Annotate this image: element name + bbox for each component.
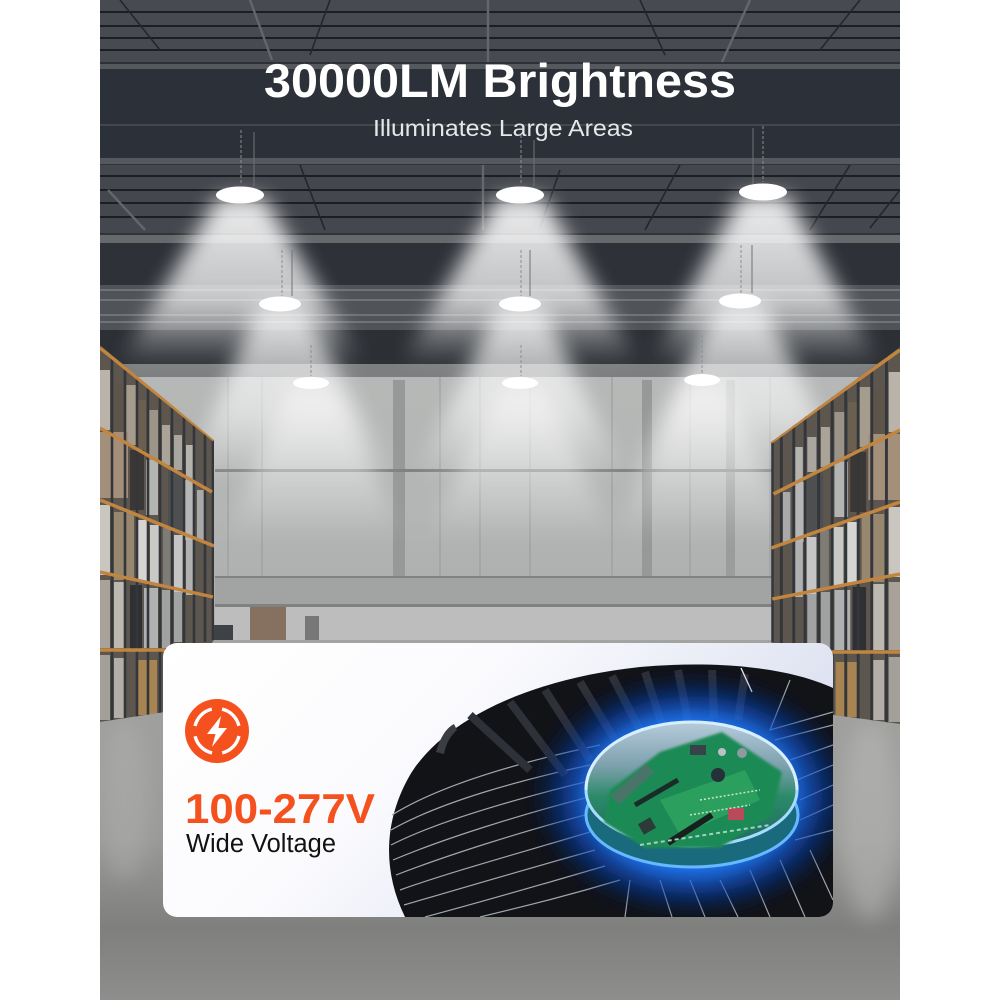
title: 30000LM Brightness bbox=[264, 54, 736, 107]
heat sink body bbox=[389, 665, 833, 917]
glass highlight bbox=[586, 722, 797, 790]
glass dome bbox=[586, 722, 797, 846]
right pallet racking bbox=[771, 347, 900, 724]
high bay lamps bbox=[216, 126, 787, 389]
back wall bbox=[100, 364, 900, 644]
heat sink shaded fins bbox=[470, 670, 745, 775]
wire bbox=[741, 668, 752, 692]
floor bbox=[100, 640, 900, 1000]
circuit board bbox=[604, 732, 782, 848]
base ring bbox=[584, 802, 800, 868]
product: heat sink with exposed driver board bbox=[389, 665, 857, 920]
subtitle: Illuminates Large Areas bbox=[373, 115, 633, 141]
left pallet racking bbox=[100, 345, 214, 722]
voltage figure: 100-277V bbox=[185, 785, 375, 832]
rack uprights bbox=[112, 350, 213, 722]
icon: voltage gauge bolt bbox=[185, 699, 249, 763]
light beams bbox=[118, 196, 880, 540]
stored goods bbox=[100, 370, 205, 720]
voltage label: Wide Voltage bbox=[186, 830, 336, 858]
heat sink fins bbox=[391, 680, 833, 917]
panel: wide voltage card bbox=[163, 643, 857, 920]
warehouse photo background bbox=[100, 0, 900, 1000]
blue glow bbox=[527, 670, 857, 920]
orange rack beams bbox=[100, 348, 214, 650]
mounting knob bbox=[436, 724, 457, 754]
ceiling bbox=[100, 0, 900, 370]
